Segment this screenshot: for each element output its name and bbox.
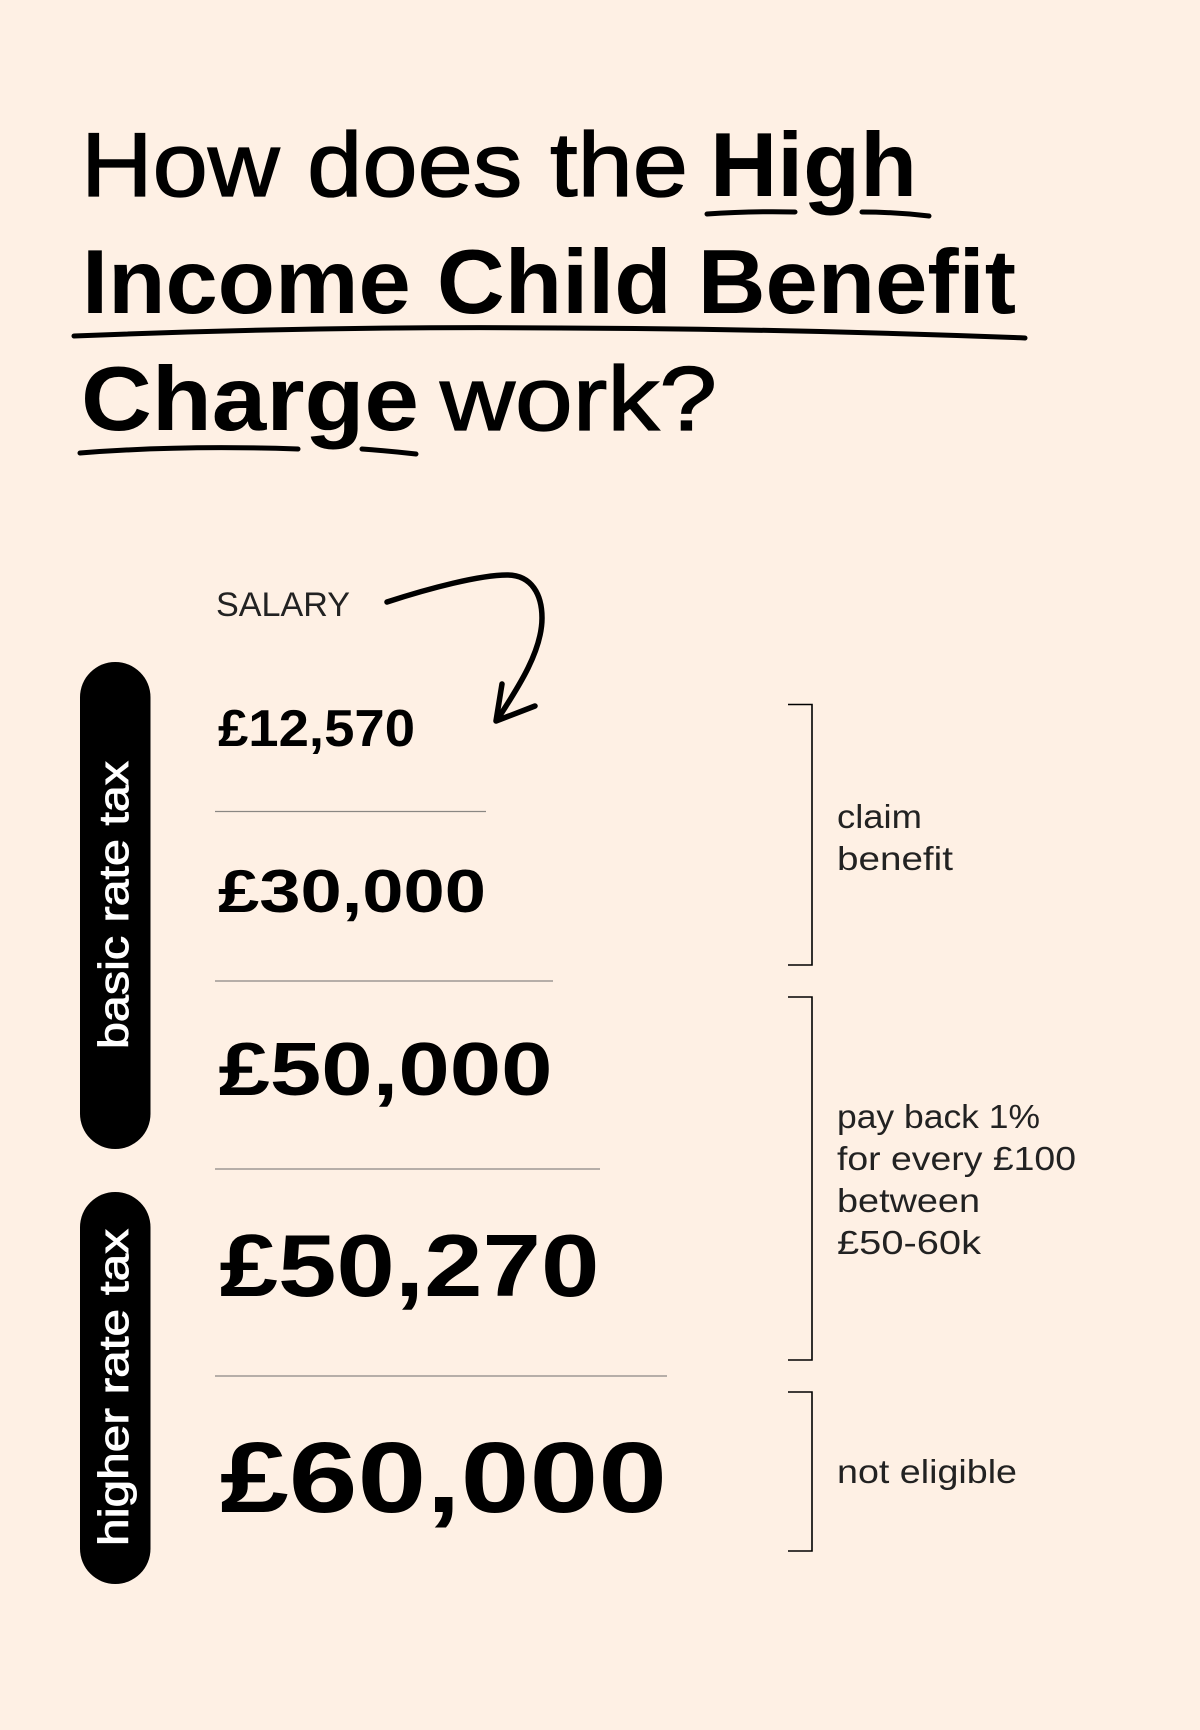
title <box>81 115 1016 450</box>
salary: £50,270: £50,270 <box>220 1216 600 1315</box>
bracket: claim benefit range <box>788 704 812 965</box>
pill: basic rate tax <box>80 662 150 1149</box>
title: Charge <box>81 349 419 450</box>
title underlines <box>74 212 1025 454</box>
salary: £60,000: £60,000 <box>220 1422 667 1534</box>
salary: £50,000: £50,000 <box>218 1027 552 1111</box>
note: claim benefit: claim <box>837 798 922 835</box>
note: pay back: for every £100 <box>837 1140 1076 1177</box>
title: work? <box>439 349 717 450</box>
title: How does the <box>81 115 688 216</box>
note: pay back: between <box>837 1182 980 1219</box>
note: not eligible: not eligible <box>837 1453 1017 1490</box>
pill: higher rate tax: higher rate tax <box>90 1229 137 1546</box>
salary: £30,000: £30,000 <box>218 858 486 925</box>
salary: £12,570: £12,570 <box>218 700 415 758</box>
note: pay back: £50-60k <box>837 1224 982 1261</box>
arrow from salary label to figures <box>387 575 542 721</box>
pill: higher rate tax <box>80 1192 150 1584</box>
note: pay back <box>837 1098 1076 1261</box>
bracket: pay back range <box>788 997 812 1360</box>
bracket: not eligible range <box>788 1392 812 1551</box>
pill: basic rate tax: basic rate tax <box>90 761 137 1049</box>
note: pay back: pay back 1% <box>837 1098 1040 1135</box>
salary label: SALARY <box>216 586 350 624</box>
title: High <box>710 115 917 216</box>
note: claim benefit <box>837 798 953 877</box>
title: Income Child Benefit <box>82 232 1016 333</box>
note: claim benefit: benefit <box>837 840 953 877</box>
